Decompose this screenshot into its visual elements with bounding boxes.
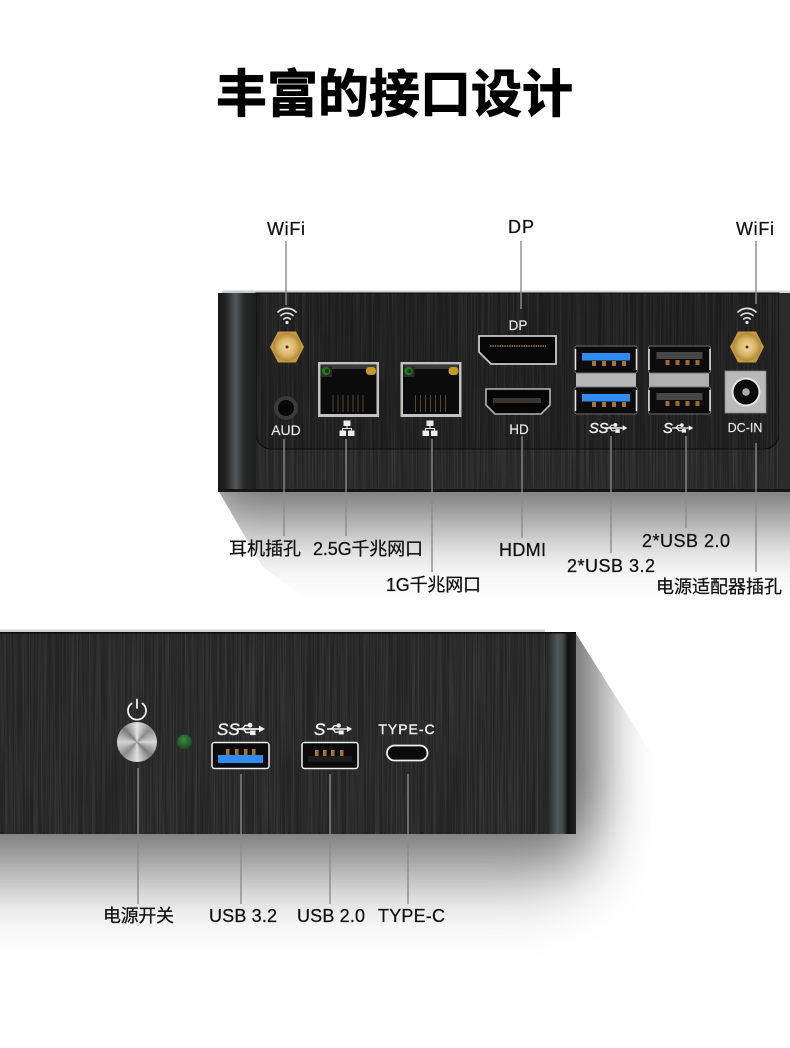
icon: wifi left: [278, 308, 296, 324]
icon: SS USB logo rear: [589, 421, 627, 437]
callout: DP: DP: [508, 217, 534, 237]
callout: 2.5G ethernet: [313, 439, 423, 559]
icon: SS USB logo rear: SS: [589, 421, 609, 437]
port: 1G ethernet: [400, 362, 462, 417]
port: USB 2.0 front: [302, 742, 358, 768]
port label: TYPE-C: TYPE-C: [378, 721, 436, 737]
callout: headphone jack: 耳机插孔: [229, 539, 301, 559]
callout: DP: [508, 217, 534, 309]
callout: WiFi left: WiFi: [267, 219, 305, 239]
icon: USB logo front: [314, 720, 352, 739]
connector: antenna right: [730, 332, 764, 362]
callout: USB 3.2: USB 3.2: [209, 906, 277, 926]
button: metal power knob: [117, 722, 157, 762]
callout: USB 2.0: USB 2.0: [297, 906, 365, 926]
shadow: rear device: [219, 492, 790, 576]
port: DisplayPort: [479, 336, 556, 364]
port label: DC-IN: DC-IN: [728, 421, 762, 435]
port: DC power jack: [725, 371, 766, 413]
port: USB 2.0 stack: [648, 346, 710, 414]
icon: network 2.5G: [340, 420, 354, 436]
device: rear panel: [218, 290, 790, 492]
icon: power symbol: [128, 700, 146, 720]
port: HDMI: [486, 389, 550, 414]
callout: 1G ethernet: 1G千兆网口: [386, 575, 481, 595]
device: front panel: [0, 630, 576, 834]
callout: power adapter port: 电源适配器插孔: [656, 577, 782, 597]
callout: 2 USB 2.0: [642, 436, 730, 551]
port: 2.5G ethernet: [318, 362, 379, 417]
callout: power switch: 电源开关: [103, 906, 174, 926]
title: 丰富的接口设计: [216, 66, 573, 123]
callout: 2 USB 2.0: 2*USB 2.0: [642, 531, 730, 551]
callout: WiFi left: [267, 219, 305, 305]
callout: WiFi right: [736, 219, 774, 304]
connector: antenna left: [270, 332, 304, 362]
icon: USB logo rear: S: [663, 421, 673, 437]
callout: HDMI: HDMI: [499, 540, 546, 560]
port label: DP: DP: [509, 318, 527, 333]
port label: AUD: AUD: [271, 422, 301, 438]
callout: WiFi right: WiFi: [736, 219, 774, 239]
port: Type-C: [387, 746, 428, 760]
port: audio jack: [274, 396, 298, 420]
callout: headphone jack: [229, 439, 301, 559]
icon: USB logo rear: [663, 421, 693, 437]
callout: HDMI: [499, 436, 546, 560]
indicator: power LED: [177, 734, 192, 750]
port label: HD: HD: [509, 422, 529, 437]
callout: 2.5G ethernet: 2.5G千兆网口: [313, 539, 423, 559]
port: USB 3.2 stack: [575, 346, 637, 414]
port: USB 3.2 front: [212, 742, 269, 768]
shadow: front device: [0, 634, 640, 928]
icon: network 1G: [422, 420, 438, 436]
icon: USB logo front: S: [314, 720, 326, 739]
callout: 2 USB 3.2: [567, 436, 655, 576]
icon: wifi right: [738, 308, 756, 324]
callout: TYPE-C: TYPE-C: [378, 906, 445, 926]
callout: 2 USB 3.2: 2*USB 3.2: [567, 556, 655, 576]
icon: SS USB logo front: [217, 720, 265, 739]
icon: SS USB logo front: SS: [217, 720, 240, 739]
